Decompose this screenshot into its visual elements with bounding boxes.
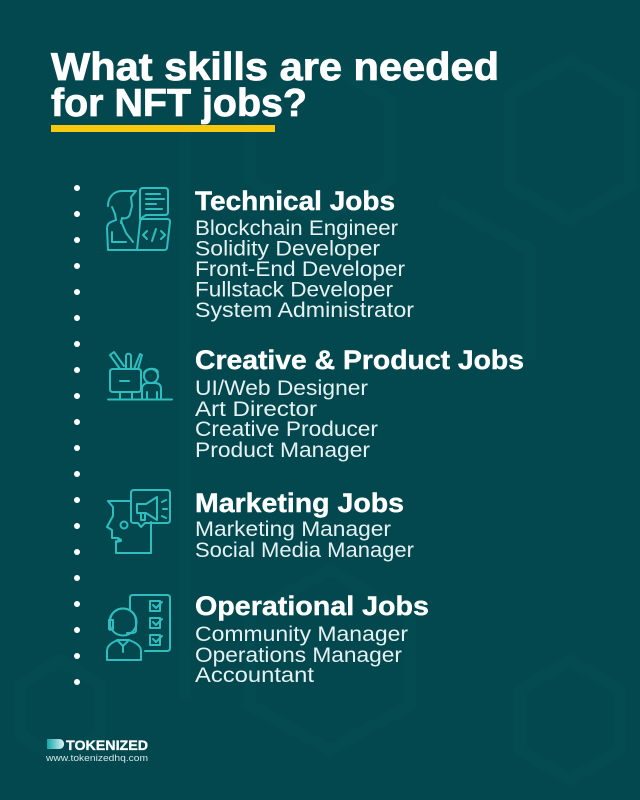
job list: marketing (195, 518, 414, 562)
job list: operational: Operations Manager (195, 644, 402, 667)
heading: marketing jobs: Marketing Jobs (195, 488, 404, 518)
dotted timeline (74, 185, 80, 685)
heading: creative and product jobs: Creative & Product Jobs (195, 345, 524, 375)
icon: operations support agent (107, 595, 170, 660)
job list: technical: Blockchain Engineer (195, 217, 398, 240)
heading: technical jobs: Technical Jobs (195, 186, 395, 216)
job list: operational (195, 623, 408, 687)
icon: marketing head with megaphone (107, 490, 170, 553)
section: operational jobs (195, 591, 429, 687)
title: for NFT jobs? (51, 82, 307, 125)
logo: Tokenized: TOKENIZED (66, 738, 148, 753)
title (51, 46, 499, 125)
job list: technical (195, 217, 414, 322)
job list: technical: Fullstack Developer (195, 278, 393, 302)
job list: creative: Creative Producer (195, 418, 378, 441)
icon: creative desk (108, 352, 172, 400)
job list: creative: Product Manager (195, 439, 370, 462)
heading: operational jobs: Operational Jobs (195, 591, 429, 621)
logo: Tokenized: www.tokenizedhq.com (45, 753, 148, 764)
job list: marketing: Marketing Manager (195, 518, 391, 541)
job list: operational: Community Manager (195, 623, 408, 646)
job list: marketing: Social Media Manager (195, 539, 414, 562)
job list: creative: Art Director (195, 398, 317, 421)
job list: technical: System Administrator (195, 299, 414, 322)
title: What skills are needed (51, 46, 499, 89)
title underline (51, 125, 275, 132)
icon: logo mark (47, 739, 64, 749)
section: creative and product jobs (195, 345, 524, 462)
job list: creative: UI/Web Designer (195, 377, 368, 400)
icon: developer at laptop (107, 188, 170, 250)
logo: Tokenized (45, 738, 148, 764)
section: technical jobs (195, 186, 414, 322)
section: marketing jobs (195, 488, 414, 562)
job list: technical: Solidity Developer (195, 238, 380, 260)
job list: creative (195, 377, 378, 462)
job list: operational: Accountant (195, 664, 314, 687)
job list: technical: Front-End Developer (195, 258, 405, 281)
